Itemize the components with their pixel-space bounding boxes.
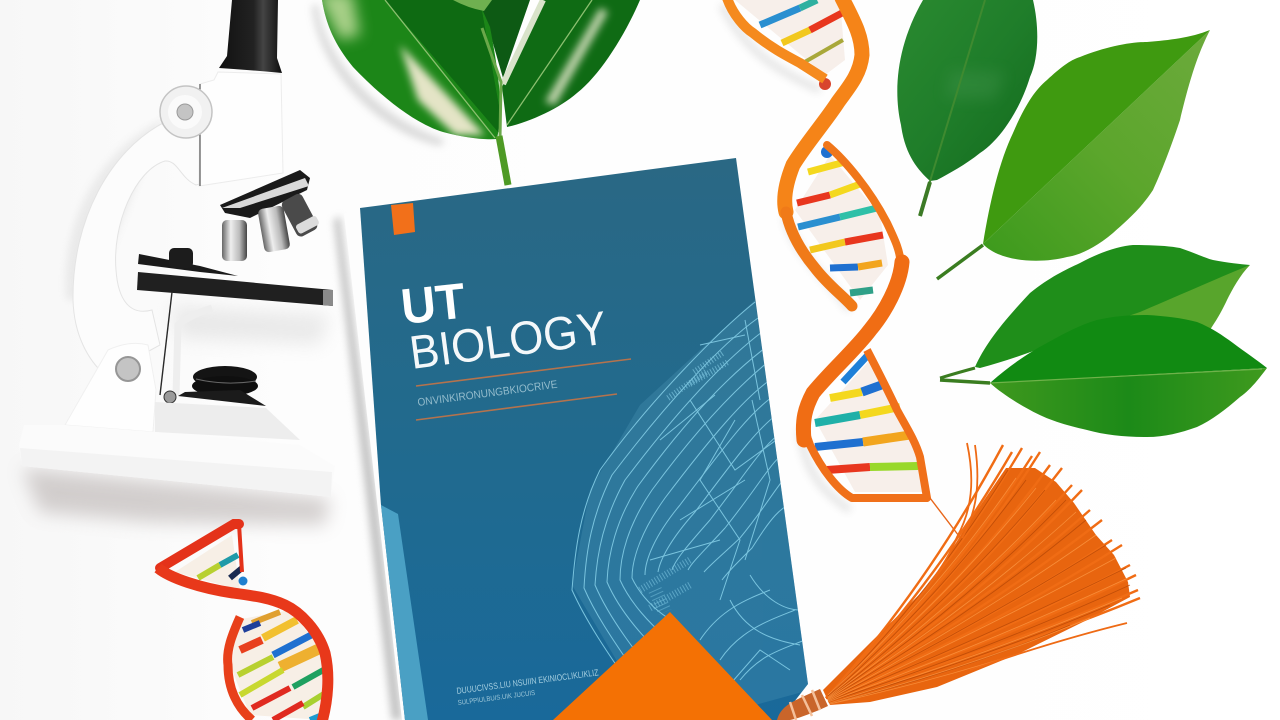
stem (482, 28, 501, 138)
left leaf (316, 0, 505, 145)
shadow (722, 5, 850, 510)
pivot screw (116, 357, 140, 381)
leaf midribs (385, 0, 592, 138)
small DNA helix (158, 524, 328, 720)
tassel threads (826, 445, 1140, 698)
small tip leaf (453, 0, 492, 11)
loose threads (930, 443, 1127, 670)
focus knob (160, 86, 212, 138)
bottom leaf upper half (990, 315, 1267, 383)
pale stripe (503, 0, 543, 84)
red ribbon main (158, 568, 328, 720)
orange rule upper (416, 359, 631, 386)
dark leaf (897, 0, 1037, 181)
microscope arm (73, 122, 215, 375)
publisher sub line: SULPPIULBUIS.UIK JUCUIS (457, 690, 536, 707)
objective lens middle (257, 205, 291, 253)
objective lens right (280, 192, 319, 238)
red ribbon lower loop (228, 617, 252, 720)
book title: BIOLOGY: BIOLOGY (406, 301, 610, 379)
right leaves (897, 0, 1267, 437)
book title: UT: UT (398, 273, 468, 335)
tassel (777, 443, 1140, 720)
back centre leaf (478, 0, 530, 78)
blue cover (360, 158, 808, 720)
tassel cap (777, 689, 828, 720)
red ribbon upper (160, 524, 239, 568)
microscope shadow (22, 468, 330, 525)
base pair rungs (198, 555, 327, 720)
tassel cord (930, 498, 962, 540)
orange triangle (553, 612, 772, 720)
blue bead (238, 576, 248, 586)
tassel body (823, 468, 1130, 705)
publisher line: DUUUCIVSS.LIU NSUIIN EKINIOCLIKLIKLIZ (456, 667, 599, 696)
stage clip (138, 254, 238, 276)
bright leaf upper half (983, 30, 1210, 244)
base plate (155, 402, 300, 440)
foot of arm (65, 343, 156, 432)
right leaf (500, 0, 642, 130)
bright leaf lower half (983, 30, 1210, 261)
front strand lower (803, 262, 902, 440)
ladder background (735, 0, 925, 492)
bottom leaf lower half (990, 368, 1267, 437)
orange tab (391, 203, 415, 235)
orange rule lower (416, 394, 617, 420)
lens stack (164, 366, 266, 406)
book shadow (334, 216, 402, 720)
middle leaf wedge (1100, 265, 1250, 330)
network line art (572, 300, 810, 720)
top leaves (312, 0, 642, 185)
middle leaf (975, 245, 1250, 368)
front strand upper (785, 0, 862, 212)
eyepiece tube (219, 0, 282, 73)
leaf shadow (312, 5, 445, 146)
stage support (160, 292, 172, 395)
blue end caps (821, 146, 833, 158)
stage (137, 272, 333, 306)
main DNA helix (722, 0, 962, 540)
microscope (19, 0, 335, 525)
book subtitle: ONVINKIRONUNGBKIOCRIVE (417, 379, 558, 409)
microscope head (199, 72, 283, 186)
nosepiece (220, 170, 310, 218)
white page edge (344, 208, 405, 720)
book cover (334, 158, 810, 720)
ladder background (175, 535, 322, 720)
objective lens left (222, 220, 247, 261)
back strands (827, 145, 901, 265)
light blue spine band (381, 505, 428, 720)
base pair rungs (760, 0, 918, 470)
